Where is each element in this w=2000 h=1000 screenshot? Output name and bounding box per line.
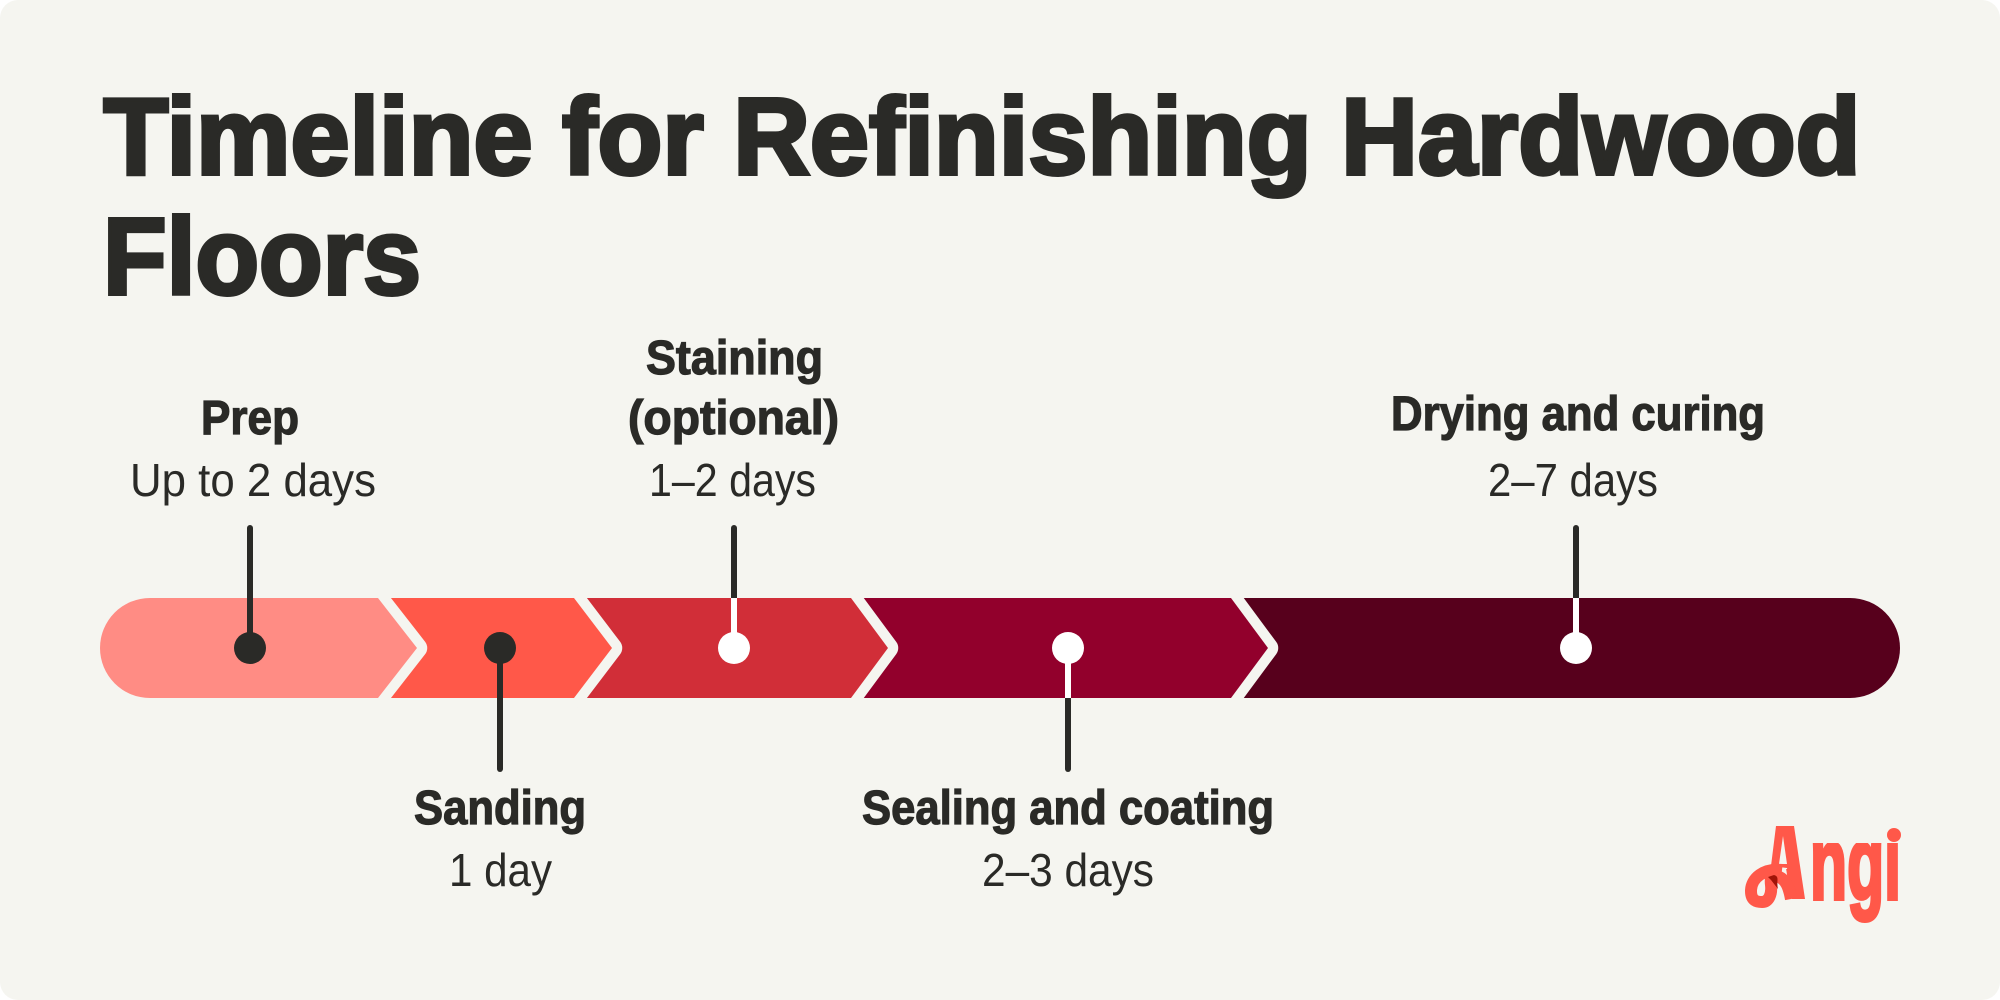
segment: staining [560,598,888,698]
label: sealing and coating: 2–3 days [982,844,1154,896]
marker: sealing and coating [1052,632,1084,769]
label: drying and curing [1391,388,1765,506]
label: prep [130,392,376,506]
label: sealing and coating: Sealing and coating [862,782,1274,835]
segment: sealing and coating [830,598,1268,698]
segment: drying and curing [1200,598,1900,698]
title: Floors [103,196,421,318]
label: sealing and coating [862,782,1274,896]
label: sanding [414,782,586,896]
label: sanding: 1 day [449,844,552,896]
segment: sanding [350,598,612,698]
marker: drying and curing [1560,528,1592,664]
label: staining: 1–2 days [649,454,816,506]
label: staining [628,332,839,506]
logo: Angi [1745,826,1901,923]
label: drying and curing: Drying and curing [1391,388,1765,441]
logo: Angi: A [1768,804,1806,922]
marker: sanding [484,632,516,769]
title: Timeline for Refinishing Hardwood [104,76,1860,198]
title [103,76,1860,318]
marker: prep [234,528,266,664]
label: drying and curing: 2–7 days [1488,454,1658,506]
segment: prep [100,598,417,698]
label: staining: (optional) [628,392,839,445]
label: prep: Prep [201,392,299,445]
label: sanding: Sanding [414,782,586,835]
label: staining: Staining [646,332,823,385]
logo: Angi: ngi [1810,806,1901,922]
timeline bar [100,598,1900,698]
label: prep: Up to 2 days [130,454,376,506]
marker: staining [718,528,750,664]
